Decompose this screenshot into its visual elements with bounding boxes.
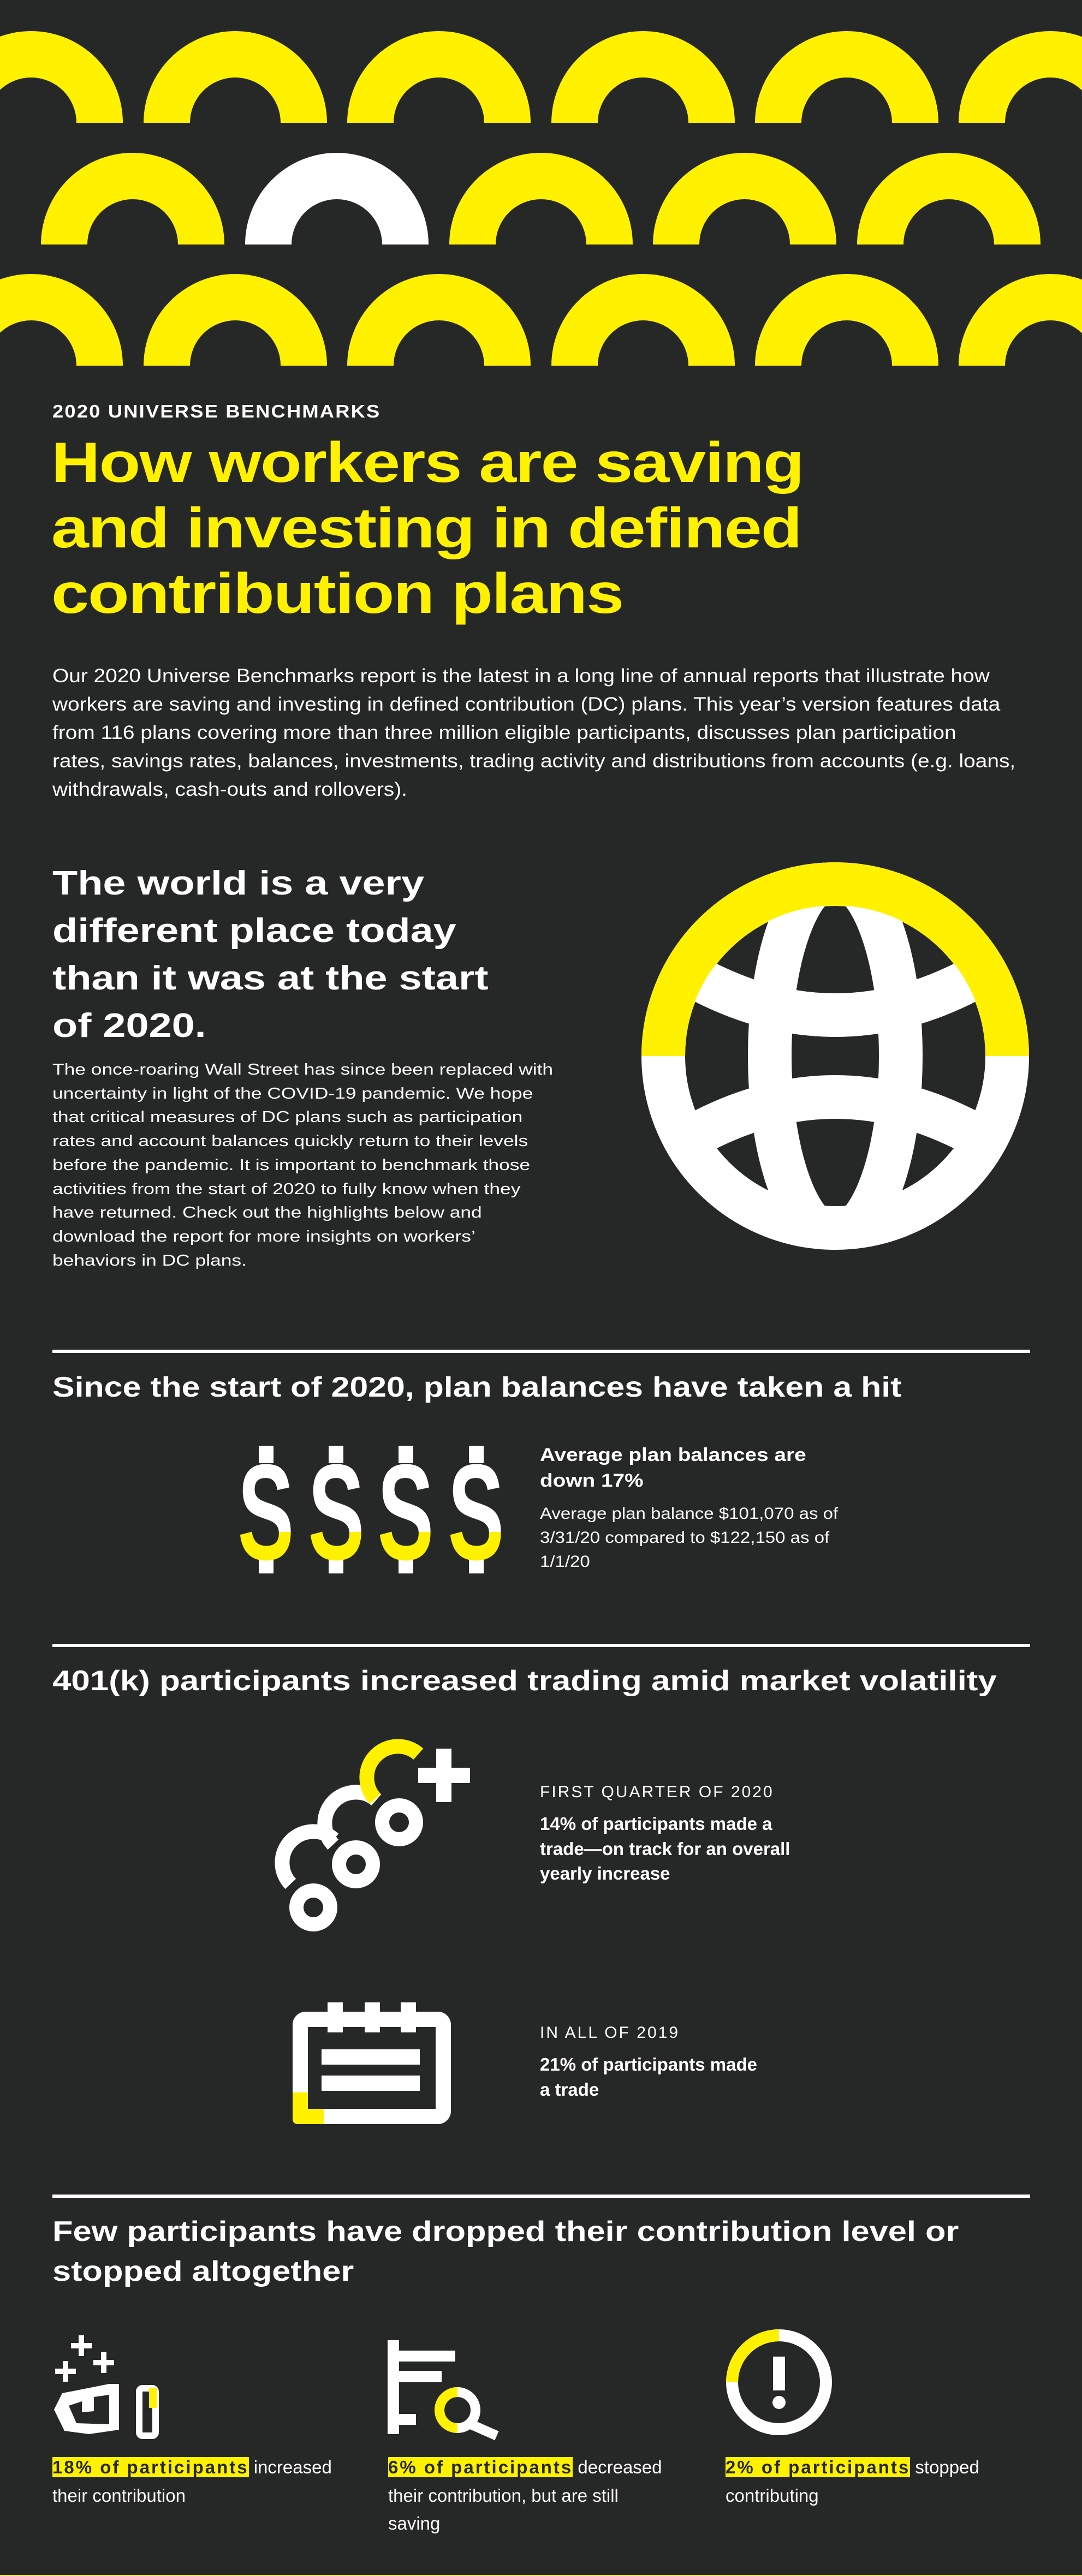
stat: stopped: contributing [726,2485,819,2505]
intro paragraph: withdrawals, cash-outs and rollovers). [52,779,407,800]
trading stat 2019: IN ALL OF 2019 [540,2024,680,2042]
icon: dollar signs [237,1436,504,1589]
icon: filter with magnifier [388,2340,497,2436]
balances stat: Average plan balances are [540,1445,806,1465]
icon: hand with plus signs [54,2335,157,2436]
stat: decreased [388,2457,662,2533]
stat: decreased: their contribution, but are still [388,2485,619,2505]
world body text: download the report for more insights on workers’ [52,1228,475,1245]
heading: contributions: stopped altogether [52,2256,354,2287]
icon: calendar [293,2002,443,2124]
intro paragraph: Our 2020 Universe Benchmarks report is the latest in a long line of annual reports that illustrate how [52,665,990,687]
balances stat: down 17% [540,1470,644,1491]
intro paragraph: from 116 plans covering more than three million eligible participants, discusses plan participation [52,722,956,743]
stat: increased: 18% of participants increased [52,2457,332,2477]
heading: balances: Since the start of 2020, plan balances have taken a hit [52,1372,901,1403]
trading stat Q1 2020: FIRST QUARTER OF 2020 [540,1783,774,1801]
world heading: different place today [52,912,456,950]
icon: trading coins [282,1746,470,1924]
world heading [52,864,489,1045]
balances stat: 3/31/20 compared to $122,150 as of [540,1529,829,1547]
title: contribution plans [51,562,623,625]
icon: dollar signs: S [448,1436,504,1589]
arch pattern header [0,31,1082,366]
stat: stopped: 2% of participants stopped [726,2457,979,2477]
title: How workers are saving [51,431,804,494]
world body text: uncertainty in light of the COVID-19 pandemic. We hope [52,1085,533,1102]
balances stat: 1/1/20 [540,1553,590,1571]
stat: increased: their contribution [52,2485,186,2505]
world body text: that critical measures of DC plans such as participation [52,1108,522,1126]
world body text: have returned. Check out the highlights below and [52,1204,482,1221]
world heading: of 2020. [52,1007,206,1045]
world body text: rates and account balances quickly return to their levels [52,1132,528,1150]
heading: trading: 401(k) participants increased trading amid market volatility [52,1665,997,1697]
trading stat 2019: a trade [540,2079,599,2099]
world body text: activities from the start of 2020 to fully know when they [52,1180,520,1198]
trading stat 2019 [540,2024,757,2099]
trading stat 2019: 21% of participants made [540,2054,757,2074]
icon: dollar signs: S [237,1436,294,1589]
eyebrow: 2020 UNIVERSE BENCHMARKS [52,401,381,421]
balances stat [540,1445,839,1571]
balances stat: Average plan balance $101,070 as of [540,1505,838,1523]
title: and investing in defined [51,497,801,560]
world body text: behaviors in DC plans. [52,1252,247,1269]
trading stat Q1 2020: yearly increase [540,1863,670,1883]
world heading: than it was at the start [52,959,489,997]
world body text [52,1061,553,1269]
icon: globe [655,876,1015,1236]
heading: contributions: Few participants have dropped their contribution level or [52,2216,959,2247]
trading stat Q1 2020: 14% of participants made a [540,1814,772,1834]
heading: contributions [52,2216,959,2287]
trading stat Q1 2020: trade—on track for an overall [540,1838,790,1859]
stat: stopped [726,2457,979,2506]
stat: decreased: saving [388,2513,440,2533]
title [51,431,804,625]
world body text: The once-roaring Wall Street has since been replaced with [52,1061,553,1078]
trading stat Q1 2020 [540,1783,790,1883]
intro paragraph: workers are saving and investing in defined contribution (DC) plans. This year’s version features data [52,694,1000,715]
icon: dollar signs: S [377,1436,434,1589]
icon: dollar signs: S [308,1436,365,1589]
world body text: before the pandemic. It is important to benchmark those [52,1156,530,1174]
stat: increased [52,2457,332,2505]
intro paragraph: rates, savings rates, balances, investments, trading activity and distributions from accounts (e.g. loans, [52,750,1015,772]
intro paragraph [52,665,1015,800]
stat: decreased: 6% of participants decreased [388,2457,662,2477]
world heading: The world is a very [52,864,424,902]
icon: exclamation circle [732,2335,826,2429]
